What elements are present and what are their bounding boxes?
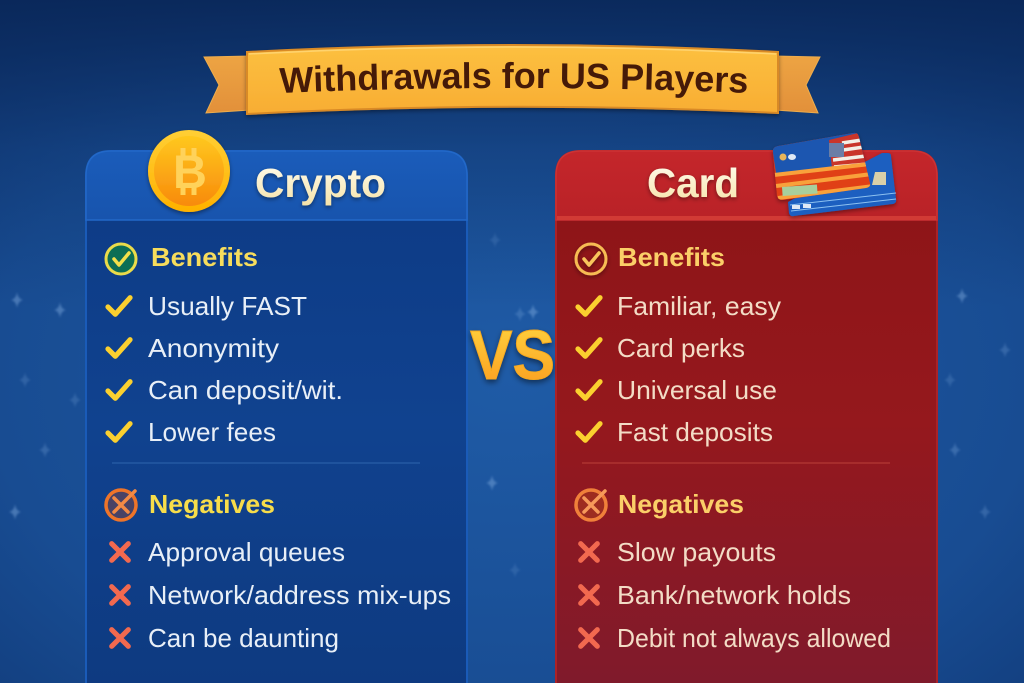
panel body (556, 151, 937, 683)
back card (788, 153, 896, 216)
icon: check circle (106, 244, 136, 274)
negatives label: Negatives (149, 489, 275, 519)
benefits list: Fast deposits (617, 417, 773, 447)
icon: x circle (106, 490, 136, 520)
card heading: Card (647, 160, 739, 206)
panel: crypto (86, 130, 467, 683)
benefits list (108, 291, 343, 447)
benefits list: Universal use (617, 375, 777, 405)
VS emblem: VS (470, 316, 555, 394)
negatives list (112, 537, 451, 653)
benefits list: Lower fees (148, 417, 276, 447)
icon: check circle (576, 244, 606, 274)
panel body (86, 151, 467, 683)
benefits list: Anonymity (148, 333, 279, 363)
icon: credit cards (770, 130, 896, 216)
ribbon centre (247, 45, 778, 114)
benefits list: Can deposit/wit. (148, 375, 343, 405)
ribbon tail left (204, 56, 250, 113)
panel: card (556, 130, 937, 683)
negatives heading (106, 489, 275, 520)
crypto heading: Crypto (255, 160, 386, 206)
negatives list (581, 537, 891, 653)
ribbon top highlight (249, 47, 776, 54)
title banner (203, 44, 821, 119)
benefits label: Benefits (618, 242, 725, 272)
benefits list: Usually FAST (148, 291, 307, 321)
negatives heading (576, 489, 744, 520)
icon: bitcoin coin (148, 130, 230, 212)
ribbon tail right (775, 56, 820, 113)
panel header (556, 151, 937, 220)
benefits label: Benefits (151, 242, 258, 272)
icon: bitcoin coin: B (173, 145, 207, 198)
negatives label: Negatives (618, 489, 744, 519)
front card with flag (770, 130, 875, 205)
benefits heading (576, 242, 725, 274)
negatives list: Can be daunting (148, 623, 339, 653)
negatives list: Bank/network holds (617, 580, 851, 610)
benefits heading (106, 242, 258, 274)
title: Withdrawals for US Players (279, 62, 747, 98)
negatives list: Network/address mix-ups (148, 580, 451, 610)
benefits list: Card perks (617, 333, 745, 363)
negatives list: Approval queues (148, 537, 345, 567)
header bottom edge (557, 216, 936, 220)
panel header (86, 151, 467, 220)
negatives list: Slow payouts (617, 537, 776, 567)
benefits list: Familiar, easy (617, 291, 781, 321)
negatives list: Debit not always allowed (617, 623, 891, 653)
benefits list (578, 291, 781, 447)
icon: x circle (576, 490, 606, 520)
